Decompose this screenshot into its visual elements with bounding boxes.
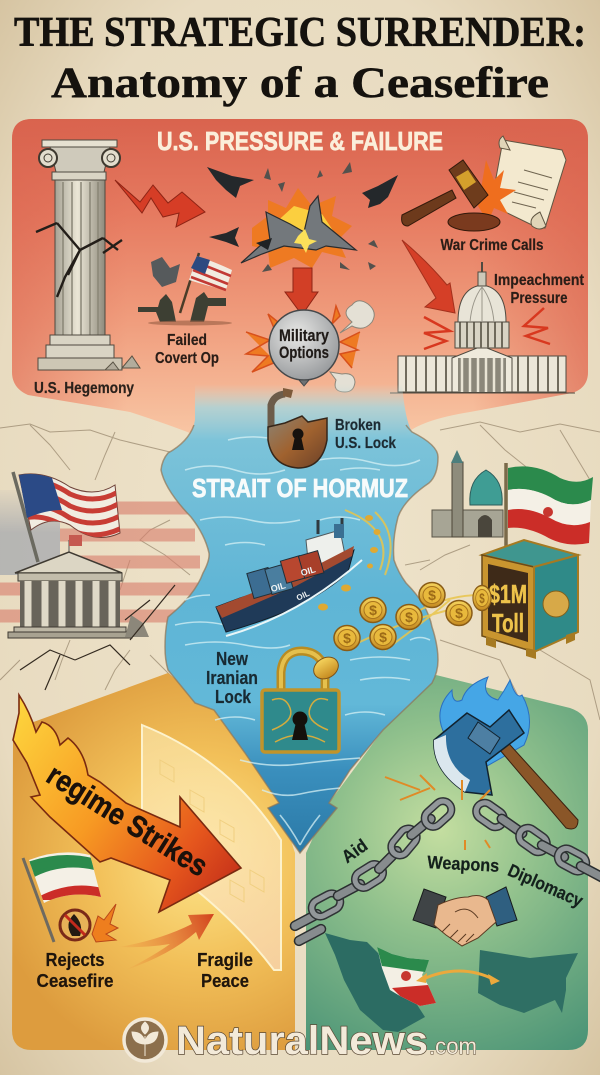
label: Broken U.S. Lock <box>335 417 396 452</box>
icon: cargo ship: OIL <box>300 564 317 578</box>
label: Broken U.S. Lock: Broken <box>335 417 381 434</box>
icon: soldiers and flag <box>138 253 232 326</box>
label: New Iranian Lock: Lock <box>215 687 252 707</box>
icon: toll box: $1M <box>489 579 527 609</box>
gavel <box>402 190 456 226</box>
title: Anatomy of a Ceasefire <box>51 60 549 107</box>
heading: Strait of Hormuz: STRAIT OF HORMUZ <box>192 473 408 503</box>
label: Broken U.S. Lock: U.S. Lock <box>335 435 396 452</box>
parchment cracks <box>0 422 600 720</box>
panel: regime strikes <box>12 673 295 1050</box>
label: New Iranian Lock: Iranian <box>206 668 258 688</box>
label: impeachment pressure: Pressure <box>510 290 568 307</box>
arrow: small red <box>119 914 214 970</box>
icon: military options balloon: Military <box>279 326 329 345</box>
icon: blue flame axe <box>434 677 578 829</box>
icon: new Iranian lock <box>262 651 342 752</box>
ripples <box>175 437 430 845</box>
icon: Iran flag <box>506 463 593 550</box>
scroll <box>491 140 566 228</box>
logo: NaturalNews.com: .com <box>429 1033 477 1059</box>
icon: cargo ship <box>216 518 362 636</box>
cracks under bank <box>20 585 175 690</box>
label: U.S. Hegemony: U.S. Hegemony <box>34 380 134 397</box>
icon: bank building <box>8 535 149 638</box>
icon: cracked column <box>36 140 140 370</box>
panel: U.S. pressure and failure <box>12 119 588 435</box>
sparks <box>385 775 490 850</box>
labels: aid weapons diplomacy: Weapons <box>427 852 500 876</box>
arrow: lightning <box>115 180 205 227</box>
label: fragile peace: Fragile <box>197 950 253 970</box>
icon: toll box: Toll <box>492 608 524 638</box>
icon: Iran flag small <box>23 852 102 942</box>
label: New Iranian Lock: New <box>216 649 249 669</box>
background flag <box>0 490 205 616</box>
logo: NaturalNews.com <box>124 1019 477 1063</box>
label: regime strikes: regime Strikes <box>41 758 213 883</box>
label: rejects ceasefire <box>36 950 114 991</box>
icon: military options balloon: Options <box>279 343 329 362</box>
logo: NaturalNews.com: NaturalNews <box>176 1019 428 1063</box>
icon: broken U.S. lock <box>268 388 327 468</box>
label: failed covert op <box>155 332 219 367</box>
icon: exploding fighter jet <box>207 162 398 272</box>
label: impeachment pressure: Impeachment <box>494 272 585 289</box>
label: rejects ceasefire: Ceasefire <box>36 971 114 991</box>
label: failed covert op: Covert Op <box>155 350 219 367</box>
icon: waving U.S. flag <box>13 472 122 562</box>
icon: no fire symbol <box>60 904 118 942</box>
arrow: flaming strike <box>13 695 241 912</box>
label: impeachment pressure <box>494 272 585 307</box>
label: fragile peace <box>197 950 253 991</box>
water: strait of hormuz <box>161 384 491 853</box>
icon: broken chain <box>289 798 600 947</box>
icon: handshake <box>413 887 517 946</box>
icon: glass shield <box>142 725 281 970</box>
icon: toll box <box>482 540 578 659</box>
burst <box>478 160 516 222</box>
labels: aid weapons diplomacy: Diplomacy <box>505 860 586 911</box>
label: New Iranian Lock <box>206 649 258 707</box>
icon: military options balloon <box>246 301 374 392</box>
panel heading: U.S. PRESSURE & FAILURE <box>157 126 443 156</box>
label: War Crime Calls: War Crime Calls <box>440 237 544 254</box>
labels: aid weapons diplomacy: Aid <box>338 835 371 867</box>
coins stream <box>318 510 491 650</box>
icon: capitol building <box>390 262 575 393</box>
panel: Iran flag, mosque and toll box <box>432 450 593 659</box>
icon: cargo ship: OIL <box>295 589 311 603</box>
labels: aid weapons diplomacy <box>338 835 586 911</box>
icon: gavel and scroll <box>402 136 566 231</box>
title <box>14 10 586 107</box>
icon: mosque <box>432 450 503 537</box>
arrow: toward capitol <box>402 240 455 313</box>
arrow: down from jet <box>285 268 318 315</box>
panel: U.S. flag and bank building <box>0 472 205 690</box>
label: failed covert op: Failed <box>167 332 207 349</box>
icon: cargo ship: OIL <box>270 580 287 594</box>
label: fragile peace: Peace <box>201 971 249 991</box>
label: rejects ceasefire: Rejects <box>46 950 104 970</box>
water shoreline <box>161 425 438 853</box>
map: Iran and U.S. <box>325 933 578 1032</box>
panel: severed ties <box>289 675 600 1050</box>
